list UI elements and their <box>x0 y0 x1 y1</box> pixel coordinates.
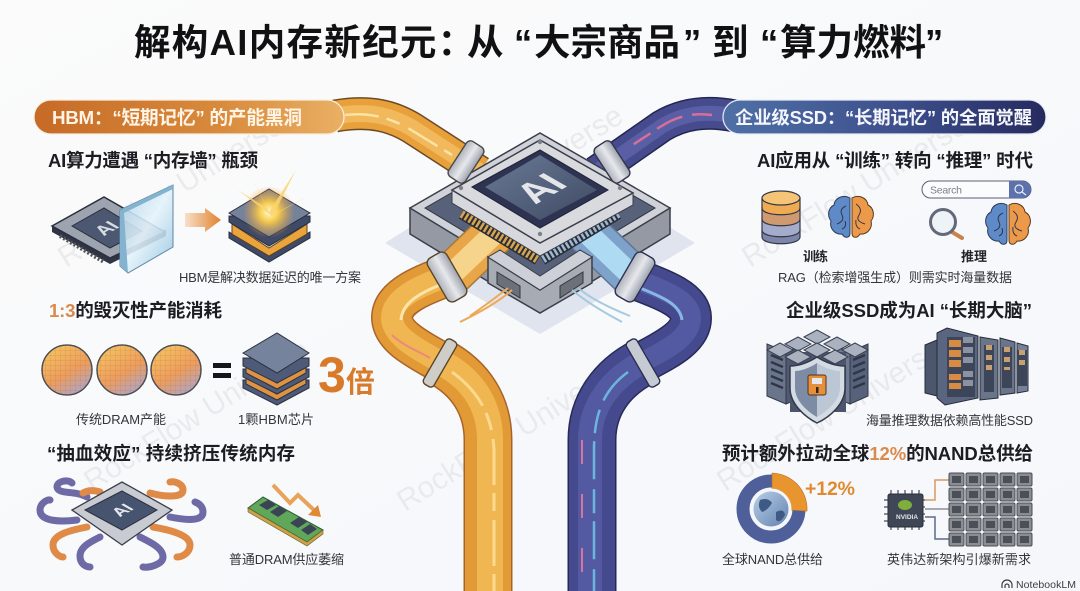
icon: four layer HBM stack <box>243 333 309 405</box>
watermark layer <box>52 99 973 518</box>
donut chart: global NAND supply <box>743 473 807 537</box>
icon: database <box>762 191 800 244</box>
title: 解构AI内存新纪元： <box>134 22 476 63</box>
icon: inference brain <box>986 203 1030 244</box>
title: ” <box>925 22 943 63</box>
icon: NVIDIA chip <box>884 490 925 530</box>
title: 算力燃料 <box>780 22 926 63</box>
left heading pill: HBM：“短期记忆” 的产能黑洞 <box>52 107 302 128</box>
watermark layer: RockFlow Universe <box>391 353 628 518</box>
arrow <box>185 208 221 232</box>
title: 到 <box>712 22 748 63</box>
icon: server cluster with shield <box>767 330 868 423</box>
caption: global NAND: 全球NAND总供给 <box>722 552 823 567</box>
NotebookLM badge: NotebookLM <box>1016 579 1076 591</box>
icon: NVIDIA chip: NVIDIA <box>896 514 918 521</box>
title: 大宗商品 <box>534 22 680 63</box>
orange upper pipe <box>335 114 480 172</box>
pipe collars <box>422 139 661 389</box>
search box <box>922 181 1031 198</box>
watermark layer: RockFlow Universe <box>736 109 973 274</box>
panel: enterprise SSD right column <box>722 100 1046 567</box>
subheading: long-term brain: 企业级SSD成为AI “长期大脑” <box>786 300 1032 321</box>
purple lower pipe <box>582 278 691 591</box>
caption: NVIDIA demand: 英伟达新架构引爆新需求 <box>887 552 1031 567</box>
3x callout: 3倍 <box>318 347 375 403</box>
front IO block <box>460 250 630 322</box>
equals sign <box>213 363 231 378</box>
orange connector <box>452 228 500 274</box>
icon: three wafers <box>42 345 201 395</box>
title: “ <box>514 22 532 63</box>
base plate <box>410 133 670 313</box>
title: ” <box>683 22 701 63</box>
central processor with data pipes <box>335 113 735 591</box>
watermark layer: RockFlow Universe <box>392 99 629 264</box>
subheading: memory wall: AI算力遭遇 “内存墙” 瓶颈 <box>48 150 258 171</box>
caption: RAG: RAG（检索增强生成）则需实时海量数据 <box>778 270 1012 285</box>
caption: DRAM capacity: 传统DRAM产能 <box>76 412 166 427</box>
caption: one HBM chip: 1颗HBM芯片 <box>238 412 314 427</box>
subheading: bloodsucking effect: “抽血效应” 持续挤压传统内存 <box>47 443 295 464</box>
caption: DRAM shrink: 普通DRAM供应萎缩 <box>229 552 344 567</box>
+12 percent label: +12% <box>805 478 855 500</box>
watermark layer: RockFlow Universe <box>711 333 948 498</box>
subheading: NAND 12 percent: 预计额外拉动全球12%的NAND总供给 <box>722 443 1033 464</box>
left heading pill <box>34 100 344 134</box>
caption: high performance SSD: 海量推理数据依赖高性能SSD <box>866 413 1033 428</box>
icon: HBM stack with burst <box>229 170 310 262</box>
right heading pill <box>723 100 1046 134</box>
icon: magnifier <box>930 210 962 238</box>
label: training: 训练 <box>803 249 828 264</box>
search box: Search <box>930 184 962 196</box>
label: inference: 推理 <box>961 249 987 264</box>
memory cell grid <box>949 473 1032 546</box>
icon: green DRAM module with falling arrow <box>248 485 323 546</box>
icon: server racks <box>925 328 1028 405</box>
right heading pill: 企业级SSD：“长期记忆” 的全面觉醒 <box>735 107 1032 128</box>
title: 从 <box>467 22 504 63</box>
subheading: training to inference: AI应用从 “训练” 转向 “推理” 时代 <box>757 150 1033 171</box>
chip label: AI <box>506 168 577 209</box>
chip ground shadow <box>385 190 695 334</box>
upper chip <box>452 140 633 256</box>
title: “ <box>760 22 778 63</box>
purple upper pipe <box>596 113 735 172</box>
orange lower pipe <box>392 275 494 591</box>
watermark layer: RockFlow Universe <box>78 333 315 498</box>
icon: training brain <box>829 196 873 237</box>
icon: AI chip with tentacles: AI <box>107 501 138 519</box>
subheading: destructive capacity: 1:3的毁灭性产能消耗 <box>49 300 222 321</box>
connector lines <box>925 480 949 539</box>
watermark layer: RockFlow Universe <box>52 109 289 274</box>
icon: chip behind glass wall: AI <box>90 219 125 239</box>
caption: HBM solution: HBM是解决数据延迟的唯一方案 <box>179 270 361 285</box>
icon: AI chip with tentacles <box>40 481 203 567</box>
icon: chip behind glass wall <box>52 185 173 273</box>
panel: HBM left column <box>34 100 375 567</box>
blue connector <box>582 228 630 274</box>
